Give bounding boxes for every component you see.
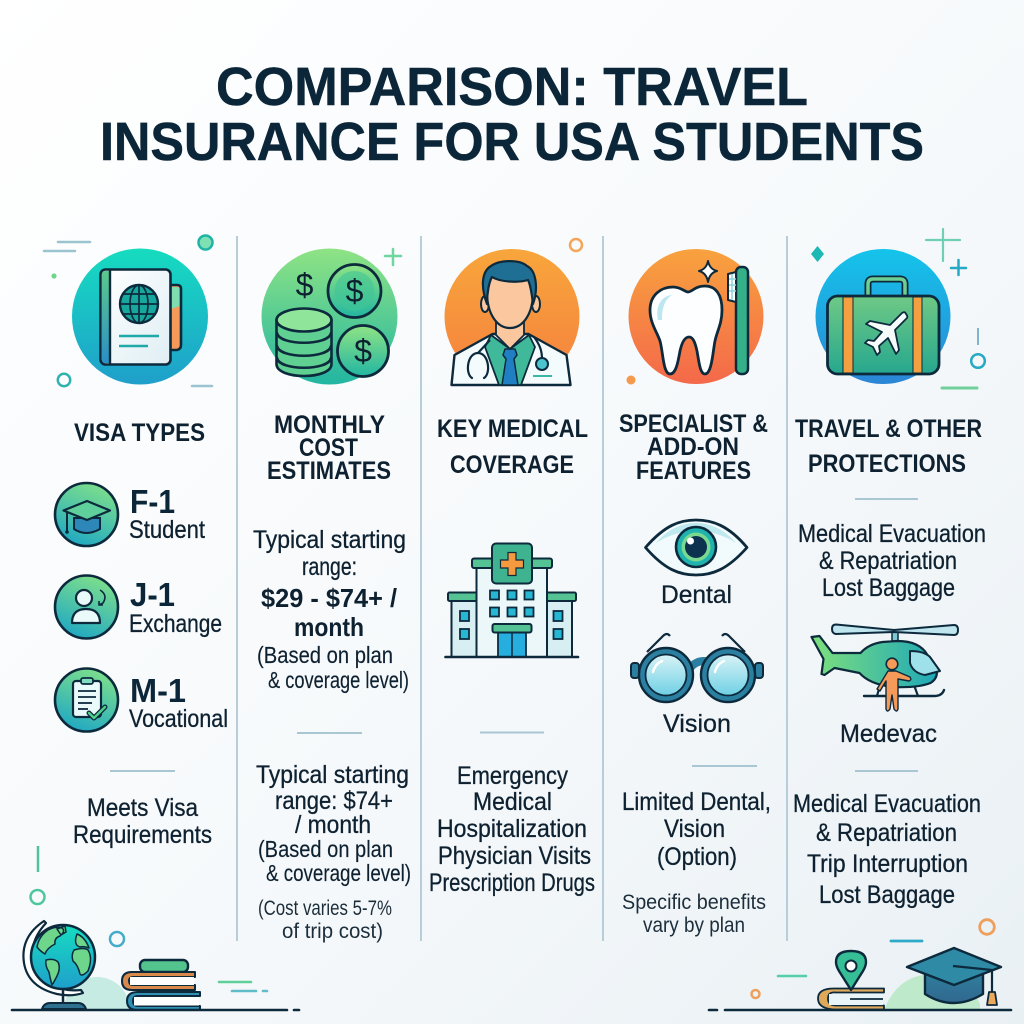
text: meets visa requirements: Requirements xyxy=(73,821,212,849)
text: upper protections list xyxy=(798,520,986,602)
F-1 visa item xyxy=(55,483,205,546)
panel: monthly cost estimates xyxy=(253,248,411,943)
title: COMPARISON: TRAVEL xyxy=(216,57,808,117)
title xyxy=(100,57,924,172)
text: typical starting range: $29 - $74+ / xyxy=(261,583,397,613)
M-1 visa item: M-1 xyxy=(130,672,186,709)
text: meets visa requirements: Meets Visa xyxy=(87,794,198,822)
panel: key medical coverage xyxy=(429,239,595,897)
text: upper protections list: Lost Baggage xyxy=(822,574,955,602)
icon: hospital xyxy=(446,544,578,657)
text: typical starting range: month xyxy=(294,612,364,642)
text: upper protections list: Medical Evacuation xyxy=(798,520,986,548)
panel: travel and other protections xyxy=(793,229,986,909)
panel: specialist and add-on features xyxy=(619,249,771,937)
heading: monthly cost estimates: COST xyxy=(299,434,358,462)
text: medical coverage list: Medical xyxy=(473,788,552,816)
title: INSURANCE FOR USA STUDENTS xyxy=(100,112,924,172)
text: medical coverage list: Emergency xyxy=(457,762,568,790)
text: specific benefits note: vary by plan xyxy=(643,914,745,937)
text: typical starting range: Typical starting xyxy=(253,526,406,554)
text: limited dental and vision: (Option) xyxy=(657,843,737,871)
text: typical starting range: range: xyxy=(302,553,357,581)
text: limited dental and vision: Vision xyxy=(664,815,725,843)
heading: specialist and add-on features: ADD-ON xyxy=(647,433,739,461)
text: second starting range: Typical starting xyxy=(256,761,409,789)
icon: glasses xyxy=(631,634,763,702)
text: limited dental and vision: Limited Dental, xyxy=(622,788,771,816)
heading: specialist and add-on features: FEATURES xyxy=(636,457,751,485)
heading: key medical coverage: KEY MEDICAL xyxy=(437,415,588,443)
heading: monthly cost estimates: MONTHLY xyxy=(274,411,385,439)
text: second starting range: & coverage level) xyxy=(266,860,411,886)
panel: visa types xyxy=(44,236,228,849)
heading: key medical coverage xyxy=(437,415,588,479)
J-1 visa item xyxy=(55,576,222,638)
text: typical starting range xyxy=(253,526,409,693)
heading: monthly cost estimates xyxy=(267,411,391,485)
text: specific benefits note xyxy=(622,891,766,937)
label: medevac: Medevac xyxy=(840,720,937,748)
M-1 visa item: Vocational xyxy=(129,705,228,733)
heading: key medical coverage: COVERAGE xyxy=(450,451,574,479)
text: upper protections list: & Repatriation xyxy=(819,547,957,575)
F-1 visa item: Student xyxy=(129,516,205,544)
text: lower protections list: Medical Evacuation xyxy=(793,790,981,818)
text: second starting range: (Based on plan xyxy=(258,836,393,862)
icon: coins xyxy=(262,248,401,384)
icon: eye xyxy=(646,520,747,575)
illustration: book, map pin and graduation cap xyxy=(709,920,1011,1010)
heading: monthly cost estimates: ESTIMATES xyxy=(267,457,391,485)
text: lower protections list: Lost Baggage xyxy=(819,881,955,909)
text: meets visa requirements xyxy=(73,794,212,849)
heading: visa types: VISA TYPES xyxy=(74,419,205,447)
illustration: globe and books xyxy=(12,846,299,1010)
text: specific benefits note: Specific benefits xyxy=(622,891,766,914)
text: second starting range: / month xyxy=(295,811,371,839)
icon: coins: $ xyxy=(354,333,372,369)
text: second starting range: (Cost varies 5-7% xyxy=(258,897,392,920)
icon: coins: $ xyxy=(296,267,314,303)
heading: travel and other protections xyxy=(795,415,982,478)
icon: tooth and toothbrush xyxy=(626,249,764,384)
icon: coins: $ xyxy=(346,273,364,309)
J-1 visa item: Exchange xyxy=(129,610,222,638)
text: lower protections list xyxy=(793,790,981,909)
text: lower protections list: Trip Interruption xyxy=(807,850,968,878)
text: second starting range: range: $74+ xyxy=(275,787,393,815)
M-1 visa item xyxy=(55,668,228,733)
J-1 visa item: J-1 xyxy=(130,576,175,613)
icon: passport xyxy=(44,236,212,386)
text: medical coverage list: Prescription Drugs xyxy=(429,869,595,897)
text: medical coverage list xyxy=(429,762,595,897)
text: second starting range: of trip cost) xyxy=(282,920,383,943)
heading: specialist and add-on features xyxy=(619,410,768,485)
icon: suitcase xyxy=(811,229,985,388)
icon: doctor xyxy=(444,239,582,385)
text: lower protections list: & Repatriation xyxy=(816,819,957,847)
F-1 visa item: F-1 xyxy=(130,483,175,520)
text: medical coverage list: Physician Visits xyxy=(438,842,591,870)
text: limited dental and vision xyxy=(622,788,771,871)
heading: travel and other protections: PROTECTIONS xyxy=(808,450,966,478)
text: medical coverage list: Hospitalization xyxy=(437,815,587,843)
text: typical starting range: (Based on plan xyxy=(257,642,393,668)
icon: medevac helicopter xyxy=(812,624,958,711)
heading: specialist and add-on features: SPECIALIST & xyxy=(619,410,768,438)
label: vision: Vision xyxy=(663,710,731,738)
label: dental: Dental xyxy=(661,581,732,609)
heading: travel and other protections: TRAVEL & OTHER xyxy=(795,415,982,443)
text: typical starting range: & coverage level) xyxy=(268,667,409,693)
text: second starting range xyxy=(256,761,411,943)
